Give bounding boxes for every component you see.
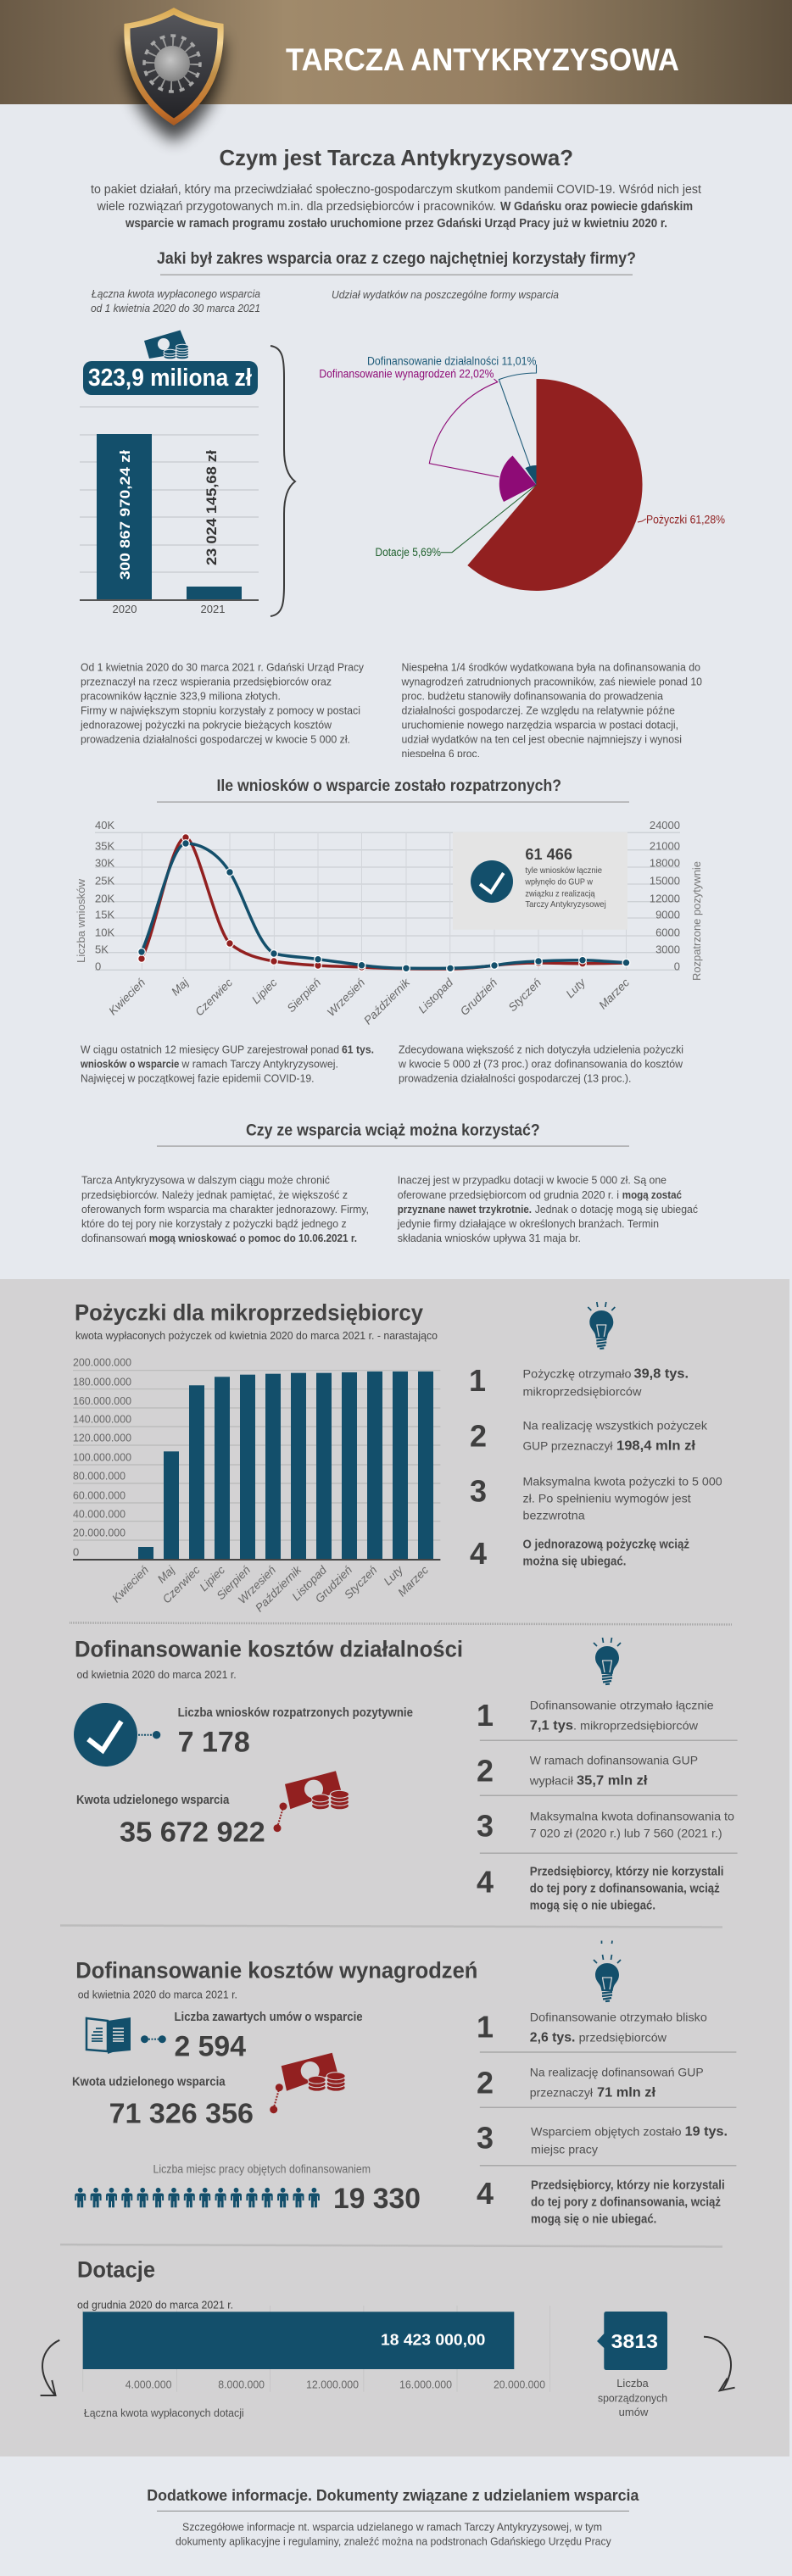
bar chart: loans cumulative: Luty — [381, 1563, 406, 1588]
text: left column on applications — [80, 1043, 374, 1085]
icon: light bulb — [588, 1302, 615, 1349]
list: loan facts: Na realizację wszystkich pożyczek — [522, 1419, 708, 1433]
heading: wage costs subsidy: od kwietnia 2020 do marca 2021 r. — [78, 1989, 237, 2001]
line chart: applications by month: Rozpatrzone pozytywnie — [690, 861, 703, 981]
bar chart: loans cumulative: 40.000.000 — [73, 1508, 125, 1521]
bar chart: loans cumulative: Marzec — [395, 1563, 431, 1599]
line chart: applications by month: 15000 — [650, 875, 680, 887]
bar chart: loans cumulative: 0 — [73, 1546, 79, 1559]
bar chart: loans cumulative: Wrzesień — [236, 1564, 278, 1606]
list: loan facts: mikroprzedsiębiorców — [522, 1385, 642, 1399]
line chart: applications by month: Styczeń — [506, 976, 544, 1014]
bar chart: loans cumulative: 140.000.000 — [73, 1413, 131, 1426]
text: left column on support: Od 1 kwietnia 2020 do 30 marca 2021 r. Gdański Urząd Pracy — [81, 661, 364, 674]
arrow: left curved — [41, 2340, 59, 2395]
list: wage subsidy facts: 3 — [477, 2120, 494, 2155]
icon: open book — [86, 2017, 131, 2054]
list: loan facts: zł. Po spełnieniu wymogów jest — [522, 1492, 691, 1505]
line chart: applications by month: Październik — [361, 976, 413, 1027]
line chart: applications by month: Marzec — [596, 976, 632, 1011]
text: left column on support — [80, 661, 364, 746]
heading: business costs subsidy: Dofinansowanie kosztów działalności — [75, 1636, 463, 1661]
text: right column on support: uruchomienie nowego narzędzia wsparcia w postaci dotacji, — [402, 719, 678, 732]
list: wage subsidy facts: 4 — [477, 2176, 494, 2211]
heading: wage costs subsidy — [75, 1957, 477, 2001]
list: wage subsidy facts — [477, 2009, 736, 2227]
stat: amount granted: Kwota udzielonego wsparcia — [76, 1794, 230, 1807]
stat: contracts signed: Liczba zawartych umów o wsparcie — [175, 2011, 363, 2024]
callout: total applications — [453, 832, 627, 930]
text: footer: dokumenty aplikacyjne i regulaminy, znaleźć można na podstronach Gdańskiego Urzędu Pracy — [176, 2535, 611, 2548]
list: wage subsidy facts: przeznaczył — [530, 2085, 594, 2099]
bar chart: yearly totals: 2021 — [201, 603, 225, 615]
line chart: applications by month: Liczba wniosków — [75, 878, 87, 963]
pie chart: shares of support — [319, 355, 725, 591]
chart captions: Udział wydatków na poszczególne formy wsparcia — [332, 289, 559, 301]
bar chart: loans cumulative — [73, 1356, 440, 1614]
intro text: wiele rozwiązań przygotowanych m.in. dla przedsiębiorców i pracowników. — [97, 200, 496, 214]
line chart: applications by month: 40K — [95, 819, 114, 832]
stat: wage support amount: Kwota udzielonego wsparcia — [72, 2076, 226, 2089]
line chart: applications by month: 15K — [95, 909, 114, 921]
heading: wage costs subsidy: Dofinansowanie kosztów wynagrodzeń — [75, 1957, 477, 1983]
bar chart: loans cumulative: Sierpień — [214, 1564, 253, 1602]
list: loan facts: GUP przeznaczył — [522, 1439, 613, 1453]
bar chart: loans cumulative: 160.000.000 — [73, 1394, 131, 1407]
bar chart: loans cumulative: Czerwiec — [160, 1563, 203, 1605]
list: loan facts: można się ubiegać. — [522, 1555, 626, 1569]
chart captions: od 1 kwietnia 2020 do 30 marca 2021 — [91, 303, 260, 314]
heading: still available: Czy ze wsparcia wciąż można korzystać? — [246, 1121, 540, 1139]
text: left column on availability: mogą wnioskować o pomoc do 10.06.2021 r. — [149, 1232, 357, 1244]
bar chart: loans cumulative: 100.000.000 — [73, 1451, 131, 1464]
bar chart: loans cumulative: 180.000.000 — [73, 1376, 131, 1388]
text: right column on availability — [397, 1174, 698, 1244]
bar chart: grants total: 20.000.000 — [494, 2378, 545, 2391]
text: footer: Szczegółowe informacje nt. wsparcia udzielanego w ramach Tarczy Antykryzysowej, w tym — [182, 2521, 602, 2534]
header banner — [0, 0, 792, 104]
stat: amount granted — [76, 1771, 349, 1847]
list: wage subsidy facts: 2,6 tys. — [530, 2031, 575, 2045]
text: right column on availability: mogą zostać — [622, 1188, 682, 1201]
list: wage subsidy facts: 71 mln zł — [597, 2085, 656, 2100]
list: loan facts — [469, 1363, 722, 1571]
line chart: applications by month: 20K — [95, 892, 114, 905]
list: business subsidy facts: Przedsiębiorcy, którzy nie korzystali — [530, 1866, 724, 1879]
text: left column on support: Firmy w największym stopniu korzystały z pomocy w postaci — [81, 704, 360, 717]
bar chart: loans cumulative: Listopad — [289, 1563, 329, 1603]
list: loan facts: 3 — [470, 1474, 487, 1509]
bar chart: yearly totals: 2020 — [113, 603, 137, 615]
line chart: applications by month: 5K — [95, 943, 109, 956]
text: right column on support: działalności gospodarczej. Ze względu na relatywnie późne — [402, 704, 675, 717]
line chart: applications by month: Wrzesień — [325, 976, 367, 1019]
heading: business costs subsidy: od kwietnia 2020 do marca 2021 r. — [76, 1668, 237, 1681]
text: right column on availability: Jednak o dotację mogą się ubiegać — [535, 1203, 698, 1216]
text: right column on support — [401, 661, 702, 760]
line chart: applications by month: 18000 — [650, 856, 680, 870]
line chart: applications by month: 0 — [674, 960, 680, 973]
bar chart: loans cumulative: 120.000.000 — [73, 1432, 131, 1444]
list: wage subsidy facts: przedsiębiorców — [579, 2031, 667, 2045]
text: right column on availability: jedynie firmy działające w określonych branżach. Termin — [397, 1217, 659, 1230]
line chart: applications by month: 6000 — [655, 926, 680, 939]
text: right column on applications: w kwocie 5 000 zł (73 proc.) oraz dofinansowania do kosztów — [398, 1057, 683, 1070]
bar chart: yearly totals — [80, 407, 259, 615]
list: business subsidy facts: mogą się o nie ubiegać. — [530, 1900, 655, 1913]
callout: number of contracts: 3813 — [611, 2330, 658, 2352]
stat: wage support amount: 71 326 356 — [109, 2097, 254, 2128]
text: left column on applications: wniosków o wsparcie — [80, 1057, 179, 1070]
list: wage subsidy facts: Wsparciem objętych zostało — [531, 2124, 682, 2138]
text: left column on applications: w ramach Tarczy Antykryzysowej. — [181, 1057, 338, 1070]
list: business subsidy facts: 2 — [477, 1754, 494, 1789]
bar chart: yearly totals: 23 024 145,68 zł — [204, 450, 220, 565]
callout: total amount: 323,9 miliona zł — [88, 364, 252, 392]
stat: positively reviewed applications — [74, 1703, 413, 1766]
callout: total applications: związku z realizacją — [525, 888, 595, 899]
list: business subsidy facts: 7 020 zł (2020 r.) lub 7 560 (2021 r.) — [530, 1827, 722, 1840]
panel: grey background — [0, 1279, 789, 2456]
text: right column on support: proc. budżetu stanowiły dofinansowania do prowadzenia — [402, 690, 664, 703]
list: business subsidy facts: Maksymalna kwota dofinansowania to — [530, 1810, 734, 1823]
text: right column on availability: składania wniosków upływa 31 maja br. — [398, 1232, 581, 1244]
text: right column on availability: Inaczej jest w przypadku dotacji w kwocie 5 000 zł. Są one — [398, 1174, 667, 1187]
heading: scope of support: Jaki był zakres wsparcia oraz z czego najchętniej korzystały firmy? — [157, 250, 636, 268]
line chart: applications by month: Sierpień — [284, 976, 323, 1015]
shield with virus icon — [124, 8, 224, 142]
text: right column on applications: Zdecydowana większość z nich dotyczyła udzielenia pożyczki — [399, 1043, 683, 1056]
intro text — [91, 183, 701, 231]
heading: grants — [77, 2257, 233, 2311]
list: loan facts: 4 — [470, 1536, 487, 1571]
bar chart: grants total: 12.000.000 — [306, 2378, 359, 2391]
list: wage subsidy facts: miejsc pracy — [531, 2143, 598, 2156]
text: left column on applications: 61 tys. — [342, 1043, 374, 1056]
line chart: applications by month: Czerwiec — [192, 976, 235, 1018]
text: right column on support: wynagrodzeń zatrudnionych pracowników, zaś niewiele ponad 10 — [401, 676, 702, 688]
text: right column on support: niespełna 6 proc. — [402, 748, 480, 760]
text: left column on availability — [81, 1174, 369, 1244]
list: wage subsidy facts: do tej pory z dofinansowania, wciąż — [531, 2196, 721, 2210]
line chart: applications by month: 24000 — [650, 819, 680, 832]
pie chart: shares of support: Pożyczki 61,28% — [646, 514, 725, 526]
text: left column on applications: W ciągu ostatnich 12 miesięcy GUP zarejestrował ponad — [81, 1043, 339, 1056]
line chart: applications by month — [75, 819, 703, 1027]
heading: what is the shield: Czym jest Tarcza Antykryzysowa? — [219, 145, 573, 170]
list: wage subsidy facts: Dofinansowanie otrzymało blisko — [530, 2010, 707, 2023]
text: left column on availability: dofinansowań — [81, 1232, 147, 1244]
line chart: applications by month: 30K — [95, 856, 114, 870]
stat: jobs covered — [75, 2162, 421, 2215]
stat: positively reviewed applications: 7 178 — [178, 1727, 250, 1759]
list: business subsidy facts: do tej pory z dofinansowania, wciąż — [530, 1883, 720, 1896]
bar chart: grants total: 4.000.000 — [125, 2378, 171, 2391]
callout: total applications: tyle wniosków łącznie — [525, 865, 602, 876]
text: left column on availability: przedsiębiorców. Należy jednak pamiętać, że większość z — [81, 1188, 348, 1201]
pie chart: shares of support: Dofinansowanie wynagrodzeń 22,02% — [319, 368, 494, 381]
main title: TARCZA ANTYKRYZYSOWA — [286, 42, 679, 77]
icon: light bulb — [594, 1638, 621, 1684]
list: wage subsidy facts: 1 — [477, 2009, 494, 2044]
line chart: applications by month: 21000 — [650, 839, 680, 853]
bar chart: loans cumulative: Maj — [155, 1563, 178, 1586]
bar chart: loans cumulative: 60.000.000 — [73, 1489, 125, 1502]
list: wage subsidy facts: Na realizację dofinansowań GUP — [530, 2065, 704, 2078]
bar chart: loans cumulative: Styczeń — [342, 1564, 380, 1601]
bar chart: loans cumulative: Kwiecień — [109, 1564, 151, 1605]
heading: loans: kwota wypłaconych pożyczek od kwietnia 2020 do marca 2021 r. - narastająco — [75, 1329, 438, 1342]
list: loan facts: 198,4 mln zł — [616, 1439, 696, 1454]
list: wage subsidy facts: mogą się o nie ubiegać. — [531, 2213, 656, 2227]
list: business subsidy facts: 7,1 tys — [530, 1719, 573, 1733]
bar chart: loans cumulative: Październik — [253, 1563, 304, 1614]
intro text: wsparcie w ramach programu zostało uruchomione przez Gdański Urząd Pracy już w kwietniu 2020 r. — [125, 217, 667, 231]
heading: grants: Dotacje — [77, 2257, 155, 2283]
text: right column on support: Niespełna 1/4 środków wydatkowana była na dofinansowania do — [402, 661, 700, 674]
stat: positively reviewed applications: Liczba wniosków rozpatrzonych pozytywnie — [178, 1706, 413, 1720]
line chart: applications by month: 35K — [95, 839, 114, 853]
text: right column on availability: przyznane nawet trzykrotnie. — [398, 1203, 532, 1216]
list: business subsidy facts: 1 — [477, 1698, 494, 1733]
pie chart: shares of support: Dotacje 5,69% — [375, 546, 441, 559]
list: wage subsidy facts: Przedsiębiorcy, którzy nie korzystali — [531, 2179, 725, 2193]
stat: wage support amount — [72, 2053, 345, 2128]
text: right column on availability: oferowane przedsiębiorcom od grudnia 2020 r. i — [398, 1188, 619, 1201]
text: footer — [176, 2521, 611, 2548]
line chart: applications by month: 0 — [95, 960, 101, 973]
heading: additional information: Dodatkowe informacje. Dokumenty związane z udzielaniem wsparcia — [147, 2486, 639, 2504]
intro text: W Gdańsku oraz powiecie gdańskim — [500, 200, 693, 214]
line chart: applications by month: Maj — [169, 976, 192, 999]
callout: number of contracts: umów — [619, 2406, 649, 2418]
list: business subsidy facts: 35,7 mln zł — [577, 1773, 648, 1788]
callout: number of contracts: sporządzonych — [598, 2391, 667, 2404]
bar chart: loans cumulative: Grudzień — [313, 1564, 354, 1605]
text: left column on support: jednorazowej pożyczki na pokrycie bieżących kosztów — [80, 719, 332, 732]
line chart: applications by month: 10K — [95, 926, 114, 939]
list: loan facts: bezzwrotna — [522, 1509, 585, 1522]
stat: contracts signed: 2 594 — [175, 2031, 246, 2063]
bar chart: grants total — [83, 2306, 550, 2419]
callout: total applications: Tarczy Antykryzysowej — [525, 899, 606, 910]
line chart: applications by month: 3000 — [655, 943, 680, 956]
list: loan facts: O jednorazową pożyczkę wciąż — [522, 1538, 689, 1552]
list: loan facts: 39,8 tys. — [634, 1367, 689, 1382]
intro text: to pakiet działań, który ma przeciwdziałać społeczno-gospodarczym skutkom pandemii COVID-19. Wśród nich jest — [91, 183, 701, 197]
text: left column on availability: oferowanych form wsparcia ma charakter jednorazowy. Firmy, — [81, 1203, 369, 1216]
heading: applications: Ile wniosków o wsparcie zostało rozpatrzonych? — [217, 777, 561, 795]
list: business subsidy facts: . mikroprzedsiębiorców — [573, 1719, 699, 1733]
text: right column on support: udział wydatków na ten cel jest obecnie najmniejszy i wynosi — [402, 733, 682, 746]
icon: banknote and coins — [144, 331, 189, 359]
bar chart: grants total: 18 423 000,00 — [381, 2332, 485, 2349]
list: loan facts: 2 — [470, 1419, 487, 1454]
list: business subsidy facts: W ramach dofinansowania GUP — [530, 1754, 698, 1767]
stat: jobs covered: 19 330 — [333, 2183, 421, 2215]
brace — [271, 346, 295, 616]
text: right column on applications — [398, 1043, 683, 1085]
arrow: right curved — [704, 2337, 735, 2390]
text: left column on support: prowadzenia działalności gospodarczej w kwocie 5 000 zł. — [81, 733, 350, 746]
callout: number of contracts — [597, 2312, 667, 2418]
list: wage subsidy facts: 2 — [477, 2065, 494, 2100]
list: loan facts: 1 — [469, 1363, 486, 1398]
stat: jobs covered: Liczba miejsc pracy objętych dofinansowaniem — [153, 2162, 371, 2175]
callout: total applications: wpłynęło do GUP w — [525, 876, 593, 887]
line chart: applications by month: Kwiecień — [106, 976, 148, 1017]
text: left column on availability: które do tej pory nie korzystały z pożyczki bądź jednego z — [81, 1217, 347, 1230]
heading: loans: Pożyczki dla mikroprzedsiębiorcy — [75, 1300, 423, 1326]
line chart: applications by month: Luty — [563, 976, 588, 1000]
bar chart: grants total: 16.000.000 — [399, 2378, 452, 2391]
list: loan facts: Maksymalna kwota pożyczki to 5 000 — [522, 1475, 722, 1488]
list: business subsidy facts: Dofinansowanie otrzymało łącznie — [530, 1699, 714, 1712]
bar chart: yearly totals: 300 867 970,24 zł — [117, 450, 133, 580]
list: business subsidy facts: wypłacił — [529, 1773, 574, 1787]
bar chart: loans cumulative: 200.000.000 — [73, 1356, 131, 1369]
stat: contracts signed — [141, 2011, 363, 2063]
text: left column on applications: Najwięcej w początkowej fazie epidemii COVID-19. — [81, 1072, 314, 1085]
bar chart: loans cumulative: 80.000.000 — [73, 1470, 125, 1483]
bar chart: grants total: 8.000.000 — [218, 2378, 265, 2391]
icon: light bulb with extra rays — [594, 1941, 621, 2001]
pie chart: shares of support: Dofinansowanie działalności 11,01% — [367, 355, 536, 368]
line chart: applications by month: Listopad — [416, 976, 455, 1015]
list: business subsidy facts — [477, 1698, 738, 1913]
bar chart: loans cumulative: 20.000.000 — [73, 1527, 125, 1539]
list: loan facts: Pożyczkę otrzymało — [522, 1367, 632, 1381]
line chart: applications by month: Lipiec — [249, 976, 280, 1006]
text: left column on support: przeznaczył na rzecz wspierania przedsiębiorców oraz — [81, 676, 332, 688]
stat: amount granted: 35 672 922 — [120, 1816, 265, 1847]
bar chart: loans cumulative: Lipiec — [198, 1563, 227, 1594]
chart captions: Łączna kwota wypłaconego wsparcia — [92, 288, 260, 300]
line chart: applications by month: 9000 — [655, 909, 680, 921]
list: business subsidy facts: 4 — [477, 1864, 494, 1899]
callout: total applications: 61 466 — [525, 846, 572, 863]
line chart: applications by month: 12000 — [650, 892, 680, 905]
bar chart: grants total: Łączna kwota wypłaconych dotacji — [84, 2406, 244, 2419]
heading: loans — [75, 1300, 438, 1342]
text: left column on support: pracowników łącznie 323,9 miliona złotych. — [81, 690, 281, 703]
heading: grants: od grudnia 2020 do marca 2021 r. — [77, 2298, 233, 2311]
heading: business costs subsidy — [75, 1636, 463, 1681]
list: wage subsidy facts: 19 tys. — [685, 2124, 728, 2139]
text: right column on applications: prowadzenia działalności gospodarczej (13 proc.). — [399, 1072, 631, 1085]
chart captions — [91, 288, 559, 314]
callout: number of contracts: Liczba — [616, 2377, 650, 2390]
list: business subsidy facts: 3 — [477, 1809, 494, 1844]
line chart: applications by month: 25K — [95, 875, 114, 887]
text: left column on availability: Tarcza Antykryzysowa w dalszym ciągu może chronić — [81, 1174, 330, 1187]
line chart: applications by month: Grudzień — [458, 976, 499, 1018]
